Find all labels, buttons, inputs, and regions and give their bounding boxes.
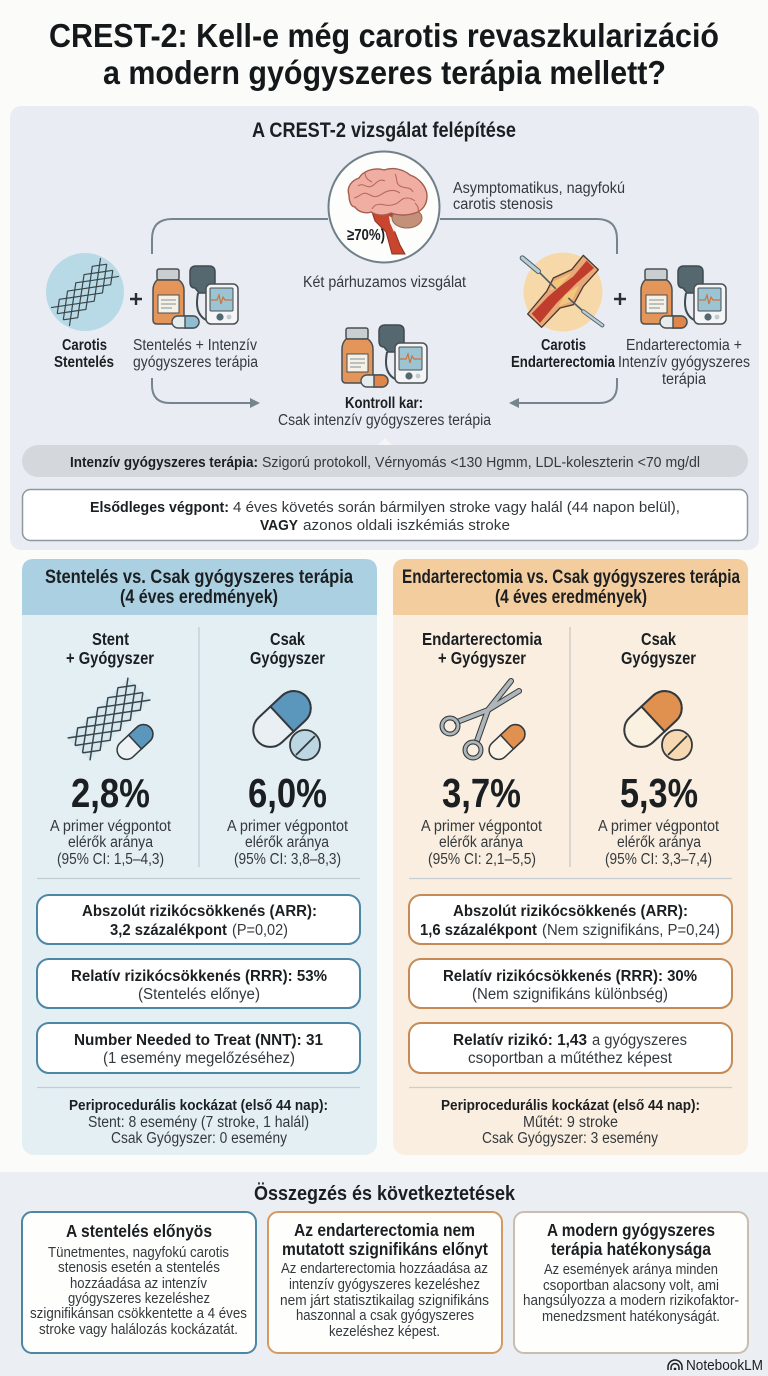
- icon: medication control: [342, 325, 427, 387]
- text: periprocedural risk surgery: Periprocedurális kockázat (első 44 nap):: [441, 1097, 700, 1114]
- column heading: drug only: [250, 629, 325, 668]
- metric box: NNT: Number Needed to Treat (NNT): 31: [74, 1032, 323, 1049]
- text: periprocedural risk stent: Csak Gyógyszer: 0 esemény: [111, 1130, 287, 1147]
- stat: drug only 5.3 percent: A primer végpontot: [598, 818, 720, 835]
- text: periprocedural risk stent: Stent: 8 esemény (7 stroke, 1 halál): [88, 1114, 309, 1131]
- metric box: ARR endarterectomy: (Nem szignifikáns, P=0,24): [542, 922, 720, 939]
- column heading: drug only: Csak: [270, 629, 305, 649]
- panel: stenting results: [22, 559, 377, 1155]
- metric box: relative risk: [409, 1023, 732, 1073]
- card: endarterectomy no benefit: haszonnal a csak gyógyszeres: [296, 1307, 474, 1324]
- column heading: stent plus drug: + Gyógyszer: [66, 648, 154, 668]
- metric box: RRR stent: Relatív rizikócsökkenés (RRR): 53%: [71, 968, 327, 985]
- heading: stenting: Stentelés vs. Csak gyógyszeres terápia: [45, 567, 353, 588]
- column heading: stent plus drug: Stent: [92, 629, 129, 649]
- column heading: endarterectomy plus drug: Endarterectomia: [422, 629, 542, 649]
- metric box: ARR stent: 3,2 százalékpont: [110, 922, 228, 939]
- heading: summary: Összegzés és következtetések: [254, 1182, 516, 1205]
- heading: trial design: A CREST-2 vizsgálat felépítése: [252, 118, 516, 142]
- metric box: ARR endarterectomy: [409, 895, 732, 944]
- card: endarterectomy no benefit: intenzív gyógyszeres kezeléshez: [289, 1276, 480, 1293]
- stat: drug only 6.0 percent: A primer végpontot: [227, 818, 349, 835]
- card: endarterectomy no benefit: nem járt statisztikailag szignifikáns: [280, 1292, 489, 1309]
- heading: endarterectomy: [402, 567, 740, 608]
- card: stenting beneficial: stroke vagy halálozás kockázatát.: [39, 1321, 238, 1338]
- stat: endarterectomy 3.7 percent: elérők aránya: [439, 834, 523, 851]
- card: modern therapy efficacy: csoportban alacsony volt, ami: [543, 1277, 719, 1294]
- card: stenting beneficial: stenosis esetén a stentelés: [58, 1259, 220, 1276]
- metric box: relative risk: a gyógyszeres: [592, 1032, 687, 1049]
- card: modern therapy efficacy: [514, 1212, 748, 1353]
- panel: endarterectomy results: [393, 559, 748, 1155]
- text: periprocedural risk surgery: [441, 1097, 700, 1147]
- title: CREST-2: Kell-e még carotis revaszkularizáció: [49, 17, 719, 54]
- label: carotis stenting: Carotis: [62, 337, 107, 354]
- label: carotis stenting: [54, 337, 114, 371]
- heading: stenting: (4 éves eredmények): [120, 587, 278, 608]
- stat: drug only 5.3 percent: 5,3%: [620, 770, 698, 816]
- icon: brain with carotis: [328, 152, 440, 262]
- panel header: endarterectomy: [393, 559, 748, 615]
- text: patient population: carotis stenosis: [453, 196, 553, 213]
- stat: drug only 5.3 percent: [598, 770, 720, 868]
- label: endarterectomy plus therapy: Endarterectomia +: [626, 337, 742, 354]
- card: modern therapy efficacy: terápia hatékonysága: [551, 1239, 711, 1259]
- icon: medication right: [641, 266, 726, 328]
- label: carotis stenting: Stentelés: [54, 354, 114, 371]
- stat: stent 2.8 percent: 2,8%: [71, 770, 150, 816]
- icon: plus left: [130, 293, 142, 305]
- metric box: ARR stent: Abszolút rizikócsökkenés (ARR):: [82, 903, 317, 920]
- stat: endarterectomy 3.7 percent: A primer végpontot: [421, 818, 543, 835]
- arrows: flow connectors: [152, 219, 617, 408]
- label: stenosis threshold: ≥70%): [347, 227, 385, 244]
- panel: trial design: [10, 106, 759, 550]
- icon: stent circle: [46, 253, 124, 331]
- card: modern therapy efficacy: Az események aránya minden: [544, 1261, 718, 1278]
- callout: primary endpoint: Elsődleges végpont:: [90, 499, 229, 516]
- icon: medication left: [153, 266, 238, 328]
- label: endarterectomy plus therapy: [618, 337, 750, 388]
- stat: drug only 6.0 percent: elérők aránya: [245, 834, 329, 851]
- card: stenting beneficial: Tünetmentes, nagyfokú carotis: [48, 1244, 229, 1261]
- icon: plus right: [614, 293, 626, 305]
- card: modern therapy efficacy: hangsúlyozza a modern rizikofaktor-: [523, 1292, 739, 1309]
- panel: summary: [0, 1172, 768, 1376]
- text: periprocedural risk stent: Periprocedurális kockázat (első 44 nap):: [69, 1097, 328, 1114]
- column heading: drug only: [621, 629, 696, 668]
- stat: drug only 5.3 percent: (95% CI: 3,3–7,4): [605, 851, 712, 868]
- metric box: RRR endarterectomy: [409, 959, 732, 1008]
- column heading: endarterectomy plus drug: + Gyógyszer: [438, 648, 526, 668]
- metric box: NNT: [37, 1023, 360, 1073]
- metric box: ARR stent: [37, 895, 360, 944]
- icon: capsule and tablet blue: [246, 684, 320, 760]
- metric box: ARR endarterectomy: 1,6 százalékpont: [420, 922, 538, 939]
- label: stenting plus therapy: [133, 337, 258, 371]
- text: periprocedural risk stent: [69, 1097, 328, 1147]
- callout: primary endpoint: [22, 490, 748, 540]
- stat: stent 2.8 percent: [50, 770, 172, 868]
- stat: drug only 6.0 percent: [227, 770, 349, 868]
- text: patient population: Asymptomatikus, nagyfokú: [453, 180, 625, 197]
- text: periprocedural risk surgery: Csak Gyógyszer: 3 esemény: [482, 1130, 658, 1147]
- card: endarterectomy no benefit: Az endarterectomia nem: [294, 1220, 475, 1240]
- title: [49, 17, 719, 91]
- column heading: drug only: Csak: [641, 629, 676, 649]
- label: control arm: Kontroll kar:: [345, 395, 423, 412]
- stat: stent 2.8 percent: A primer végpontot: [50, 818, 172, 835]
- card: modern therapy efficacy: menedzsment hatékonyságát.: [542, 1308, 720, 1325]
- card: stenting beneficial: hozzáadása az intenzív: [70, 1275, 207, 1292]
- card: endarterectomy no benefit: [268, 1212, 502, 1353]
- column heading: drug only: Gyógyszer: [250, 648, 325, 668]
- metric box: RRR stent: [37, 959, 360, 1008]
- metric box: ARR endarterectomy: Abszolút rizikócsökkenés (ARR):: [453, 903, 688, 920]
- icon: endarterectomy circle: [522, 252, 602, 332]
- card: stenting beneficial: [22, 1212, 256, 1353]
- label: control arm: Csak intenzív gyógyszeres terápia: [278, 412, 491, 429]
- card: endarterectomy no benefit: kezeléshez képest.: [329, 1323, 440, 1340]
- label: endarterectomy plus therapy: Intenzív gyógyszeres: [618, 354, 750, 371]
- stat: endarterectomy 3.7 percent: [421, 770, 543, 868]
- label: stenting plus therapy: Stentelés + Intenzív: [133, 337, 257, 354]
- metric box: NNT: (1 esemény megelőzéséhez): [103, 1050, 295, 1067]
- stat: stent 2.8 percent: elérők aránya: [68, 834, 153, 851]
- panel header: stenting: [22, 559, 377, 615]
- card: endarterectomy no benefit: mutatott szignifikáns előnyt: [282, 1239, 488, 1259]
- card: endarterectomy no benefit: Az endarterectomia hozzáadása az: [281, 1260, 488, 1277]
- card: modern therapy efficacy: A modern gyógyszeres: [547, 1220, 715, 1240]
- card: stenting beneficial: szignifikánsan csökkentette a 4 éves: [30, 1305, 247, 1322]
- metric box: relative risk: Relatív rizikó: 1,43: [453, 1032, 587, 1049]
- label: control arm: [278, 395, 491, 429]
- label: carotid endarterectomy: [511, 337, 615, 371]
- card: stenting beneficial: gyógyszeres kezeléshez: [68, 1290, 210, 1307]
- icon: stent with capsule: [68, 678, 157, 763]
- label: carotid endarterectomy: Carotis: [541, 337, 586, 354]
- metric box: ARR stent: (P=0,02): [232, 922, 288, 939]
- stat: drug only 5.3 percent: elérők aránya: [617, 834, 701, 851]
- icon: capsule and tablet orange: [617, 684, 692, 760]
- icon: scissors with capsule: [442, 681, 529, 763]
- heading: endarterectomy: (4 éves eredmények): [495, 587, 647, 608]
- metric box: RRR endarterectomy: (Nem szignifikáns különbség): [472, 986, 668, 1003]
- metric box: relative risk: csoportban a műtéthez képest: [468, 1050, 673, 1067]
- callout: intensive therapy definition: [22, 438, 748, 477]
- metric box: RRR stent: (Stentelés előnye): [138, 986, 260, 1003]
- label: endarterectomy plus therapy: terápia: [662, 371, 706, 388]
- callout: primary endpoint: azonos oldali iszkémiás stroke: [303, 517, 510, 534]
- stat: drug only 6.0 percent: (95% CI: 3,8–8,3): [234, 851, 341, 868]
- metric box: RRR endarterectomy: Relatív rizikócsökkenés (RRR): 30%: [443, 968, 697, 985]
- heading: stenting: [45, 567, 353, 608]
- card: stenting beneficial: A stentelés előnyös: [66, 1221, 212, 1241]
- title: a modern gyógyszeres terápia mellett?: [103, 54, 666, 91]
- label: carotid endarterectomy: Endarterectomia: [511, 354, 615, 371]
- text: patient population: [453, 180, 625, 213]
- stat: endarterectomy 3.7 percent: 3,7%: [442, 770, 521, 816]
- text: periprocedural risk surgery: Műtét: 9 stroke: [523, 1114, 618, 1131]
- column heading: endarterectomy plus drug: [422, 629, 542, 668]
- stat: drug only 6.0 percent: 6,0%: [248, 770, 327, 816]
- column heading: stent plus drug: [66, 629, 154, 668]
- label: stenting plus therapy: gyógyszeres terápia: [133, 354, 258, 371]
- text: parallel trials: Két párhuzamos vizsgálat: [303, 274, 467, 291]
- column heading: drug only: Gyógyszer: [621, 648, 696, 668]
- stat: endarterectomy 3.7 percent: (95% CI: 2,1–5,5): [428, 851, 536, 868]
- callout: intensive therapy definition: Intenzív gyógyszeres terápia:: [70, 454, 258, 471]
- stat: stent 2.8 percent: (95% CI: 1,5–4,3): [57, 851, 164, 868]
- callout: intensive therapy definition: Szigorú protokoll, Vérnyomás <130 Hgmm, LDL-koleszterin <70 mg/dl: [262, 454, 700, 471]
- callout: primary endpoint: 4 éves követés során bármilyen stroke vagy halál (44 napon belül),: [233, 499, 680, 516]
- callout: primary endpoint: VAGY: [260, 517, 298, 534]
